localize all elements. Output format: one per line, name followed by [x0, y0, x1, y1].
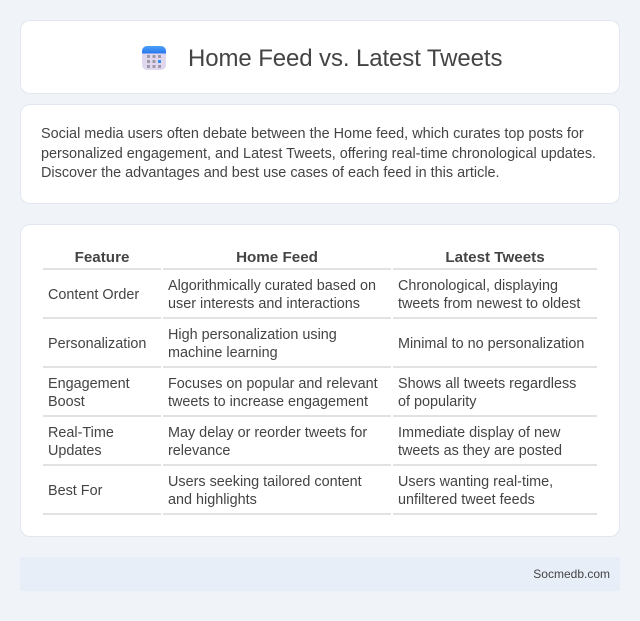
comparison table: Home Feed	[236, 249, 318, 266]
comparison table: Content Order	[48, 287, 139, 303]
comparison table: High personalization using	[168, 327, 337, 343]
comparison table: May delay or reorder tweets for	[168, 425, 367, 441]
comparison table: Personalization	[48, 336, 146, 352]
intro text: Discover the advantages and best use cases of each feed in this article.	[41, 165, 500, 181]
comparison table: of popularity	[398, 394, 476, 410]
comparison table: Latest Tweets	[445, 249, 545, 266]
comparison table: Shows all tweets regardless	[398, 376, 576, 392]
title: Home Feed vs. Latest Tweets	[188, 45, 502, 72]
footer text: Socmedb.com	[533, 567, 610, 581]
comparison table	[43, 249, 597, 515]
comparison table: Chronological, displaying	[398, 278, 558, 294]
footer bar	[20, 557, 620, 591]
comparison table: Updates	[48, 443, 102, 459]
comparison table: Best For	[48, 483, 102, 499]
comparison table: unfiltered tweet feeds	[398, 492, 535, 508]
comparison table: tweets to increase engagement	[168, 394, 368, 410]
comparison table: tweets from newest to oldest	[398, 296, 580, 312]
comparison table: relevance	[168, 443, 230, 459]
intro text	[41, 126, 596, 181]
intro text: personalized engagement, and Latest Tweets, offering real-time chronological updates.	[41, 146, 596, 162]
intro text: Social media users often debate between the Home feed, which curates top posts for	[41, 126, 584, 142]
comparison table: Algorithmically curated based on	[168, 278, 376, 294]
comparison table: Engagement	[48, 376, 130, 392]
comparison table: Immediate display of new	[398, 425, 560, 441]
comparison table: Users wanting real-time,	[398, 474, 553, 490]
comparison table: Minimal to no personalization	[398, 336, 584, 352]
comparison table: and highlights	[168, 492, 257, 508]
intro card	[20, 104, 620, 204]
comparison table: Feature	[75, 249, 129, 266]
comparison table: user interests and interactions	[168, 296, 360, 312]
comparison table: Users seeking tailored content	[168, 474, 362, 490]
comparison table: Focuses on popular and relevant	[168, 376, 378, 392]
icon: calendar	[142, 46, 166, 70]
comparison table: Real-Time	[48, 425, 114, 441]
title card	[20, 20, 620, 94]
table card	[20, 224, 620, 537]
comparison table: machine learning	[168, 345, 278, 361]
comparison table: tweets as they are posted	[398, 443, 562, 459]
comparison table: Boost	[48, 394, 85, 410]
